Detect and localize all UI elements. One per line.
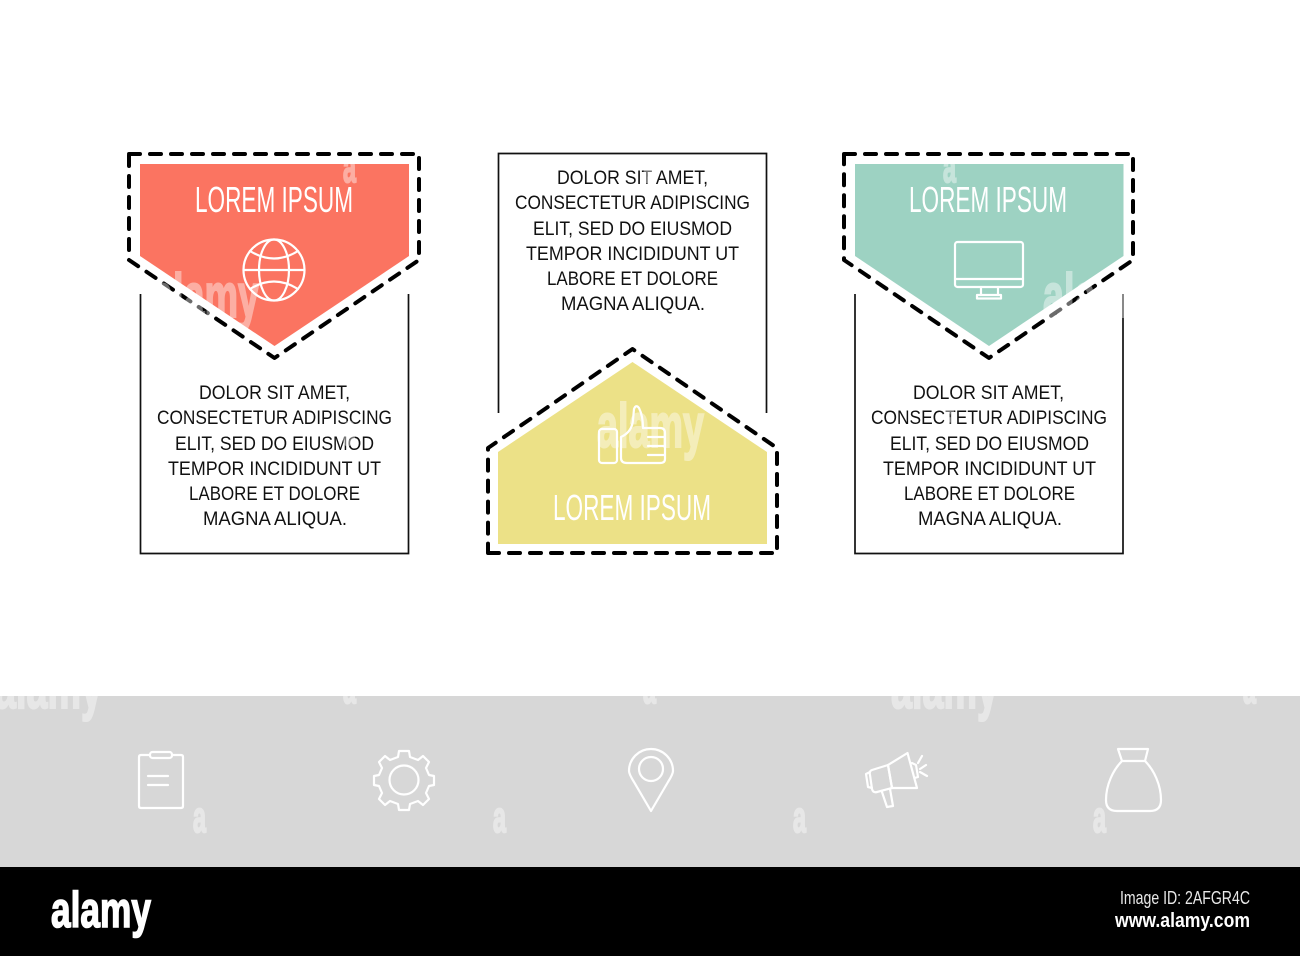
yellow pentagon xyxy=(498,362,767,544)
body text: middle card: DOLOR SIT AMET, xyxy=(557,168,708,189)
watermarks: a xyxy=(943,143,956,192)
body text: left card: CONSECTETUR ADIPISCING xyxy=(157,408,392,429)
dashed outline: left card xyxy=(129,154,419,358)
watermarks: a xyxy=(1093,793,1106,842)
heading: right card: LOREM IPSUM xyxy=(909,179,1067,220)
icon: clipboard xyxy=(139,752,183,808)
website: www.alamy.com xyxy=(1114,910,1250,932)
body text: middle card: CONSECTETUR ADIPISCING xyxy=(515,193,750,214)
footer bar xyxy=(0,867,1300,956)
watermarks: a xyxy=(643,143,656,192)
icon: sack xyxy=(1106,749,1161,811)
body text: right card: MAGNA ALIQUA. xyxy=(918,509,1062,530)
body text: middle card: LABORE ET DOLORE xyxy=(547,269,718,290)
watermarks: alamy xyxy=(597,392,704,461)
watermarks: a xyxy=(193,793,206,842)
footer logo: alamy xyxy=(51,882,151,938)
dashed outline: right card xyxy=(844,154,1133,358)
panel: middle card (yellow) xyxy=(488,154,777,553)
watermarks: a xyxy=(343,406,356,455)
panel: left card (coral) xyxy=(129,154,419,554)
body text: left card: TEMPOR INCIDIDUNT UT xyxy=(168,459,381,480)
body text: left card: ELIT, SED DO EIUSMOD xyxy=(175,434,374,455)
icon: monitor xyxy=(955,242,1023,298)
watermarks: a xyxy=(793,793,806,842)
icon: gear xyxy=(374,751,434,810)
body text: left card: MAGNA ALIQUA. xyxy=(203,509,347,530)
watermarks: alamy xyxy=(0,653,102,722)
body text: right card: CONSECTETUR ADIPISCING xyxy=(871,408,1107,429)
body text: left card xyxy=(157,383,392,530)
watermarks: a xyxy=(1243,664,1256,713)
watermarks: alamy xyxy=(891,653,998,722)
dashed outline: middle card xyxy=(488,349,777,553)
teal pentagon xyxy=(855,164,1124,346)
watermarks: a xyxy=(343,143,356,192)
body text: right card: ELIT, SED DO EIUSMOD xyxy=(890,434,1089,455)
body text: right card xyxy=(871,383,1107,530)
icon: globe xyxy=(244,240,304,300)
strip background xyxy=(0,696,1300,867)
coral pentagon xyxy=(140,164,409,346)
body text: middle card: TEMPOR INCIDIDUNT UT xyxy=(526,244,739,265)
panel: right card (teal) xyxy=(844,154,1133,554)
body text: middle card: MAGNA ALIQUA. xyxy=(561,294,705,315)
icon: thumbs up xyxy=(599,406,665,463)
text frame: right card xyxy=(855,294,1123,554)
footer background xyxy=(0,867,1300,956)
watermarks: alamy xyxy=(152,262,259,331)
body text: left card: DOLOR SIT AMET, xyxy=(199,383,350,404)
heading: middle card: LOREM IPSUM xyxy=(553,487,711,528)
watermarks xyxy=(0,143,1256,842)
panel: grey icon strip xyxy=(0,696,1300,867)
body text: middle card: ELIT, SED DO EIUSMOD xyxy=(533,219,732,240)
text frame: middle card xyxy=(498,154,766,413)
icon: location pin xyxy=(629,749,673,811)
heading: left card: LOREM IPSUM xyxy=(195,179,353,220)
icon: megaphone xyxy=(866,753,927,807)
watermarks: a xyxy=(493,793,506,842)
body text: right card: TEMPOR INCIDIDUNT UT xyxy=(883,459,1096,480)
watermarks: a xyxy=(943,393,956,442)
text frame: left card xyxy=(140,294,408,554)
body text: left card: LABORE ET DOLORE xyxy=(189,484,360,505)
image id: Image ID: 2AFGR4C xyxy=(1120,888,1250,908)
body text: middle card xyxy=(515,168,750,315)
body text: right card: DOLOR SIT AMET, xyxy=(913,383,1064,404)
watermarks: a xyxy=(343,664,356,713)
watermarks: a xyxy=(643,664,656,713)
watermarks: alamy xyxy=(1043,262,1150,331)
body text: right card: LABORE ET DOLORE xyxy=(904,484,1075,505)
